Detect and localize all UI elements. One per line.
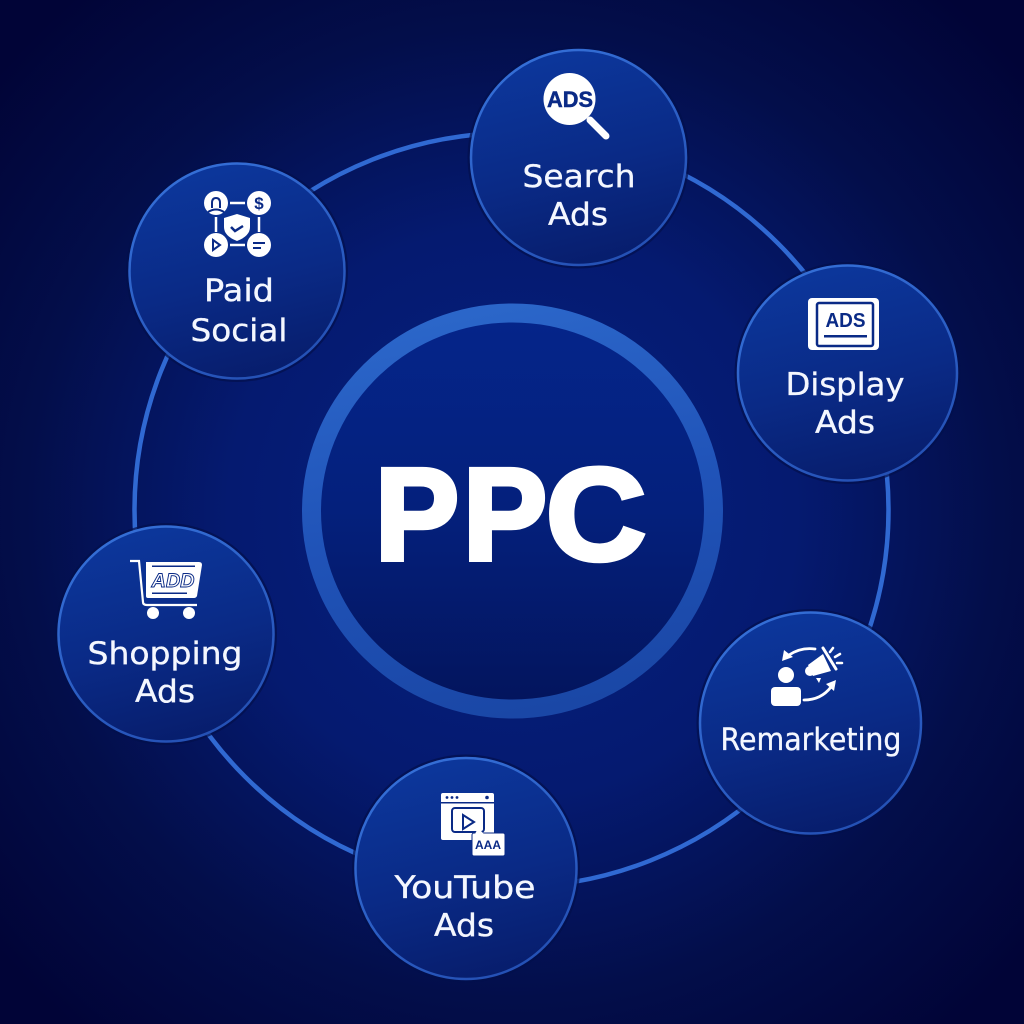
icon: display screen with ADS (808, 298, 879, 350)
hub title: C (546, 440, 646, 588)
icon: video window with caption bubble: AAA (475, 838, 501, 852)
icon: connected social nodes with shield: $ (254, 194, 264, 213)
label: Social (190, 313, 288, 349)
label: Ads (548, 197, 608, 233)
icon: magnifier with ADS: ADS (547, 87, 593, 112)
connecting orbit ring (134, 133, 888, 887)
icon: shopping cart with ADD: ADD (150, 571, 195, 592)
node: YouTube Ads (352, 754, 580, 982)
label: Ads (135, 674, 195, 710)
icon: shopping cart with ADD (130, 561, 202, 619)
icon: magnifier with ADS (544, 73, 606, 136)
label: YouTube (393, 870, 536, 906)
label: Display (786, 367, 904, 403)
icon: video window with caption bubble (441, 793, 505, 856)
label: Shopping (88, 636, 242, 672)
icon: person, megaphone and arrows (771, 648, 842, 706)
hub title: P (463, 440, 547, 588)
icon: display screen with ADS: ADS (826, 309, 866, 332)
node: Remarketing (696, 609, 924, 837)
node: Display Ads (734, 262, 960, 484)
label: Remarketing (720, 722, 902, 758)
hub title: P (375, 440, 459, 588)
node: Search Ads (468, 46, 690, 268)
central hub: PPC (312, 313, 714, 709)
label: Paid (204, 273, 274, 309)
icon: connected social nodes with shield (204, 191, 271, 257)
label: Search (522, 159, 636, 195)
label: Ads (815, 405, 875, 441)
node: Paid Social (126, 160, 348, 382)
label: Ads (434, 908, 494, 944)
node: Shopping Ads (55, 523, 277, 745)
